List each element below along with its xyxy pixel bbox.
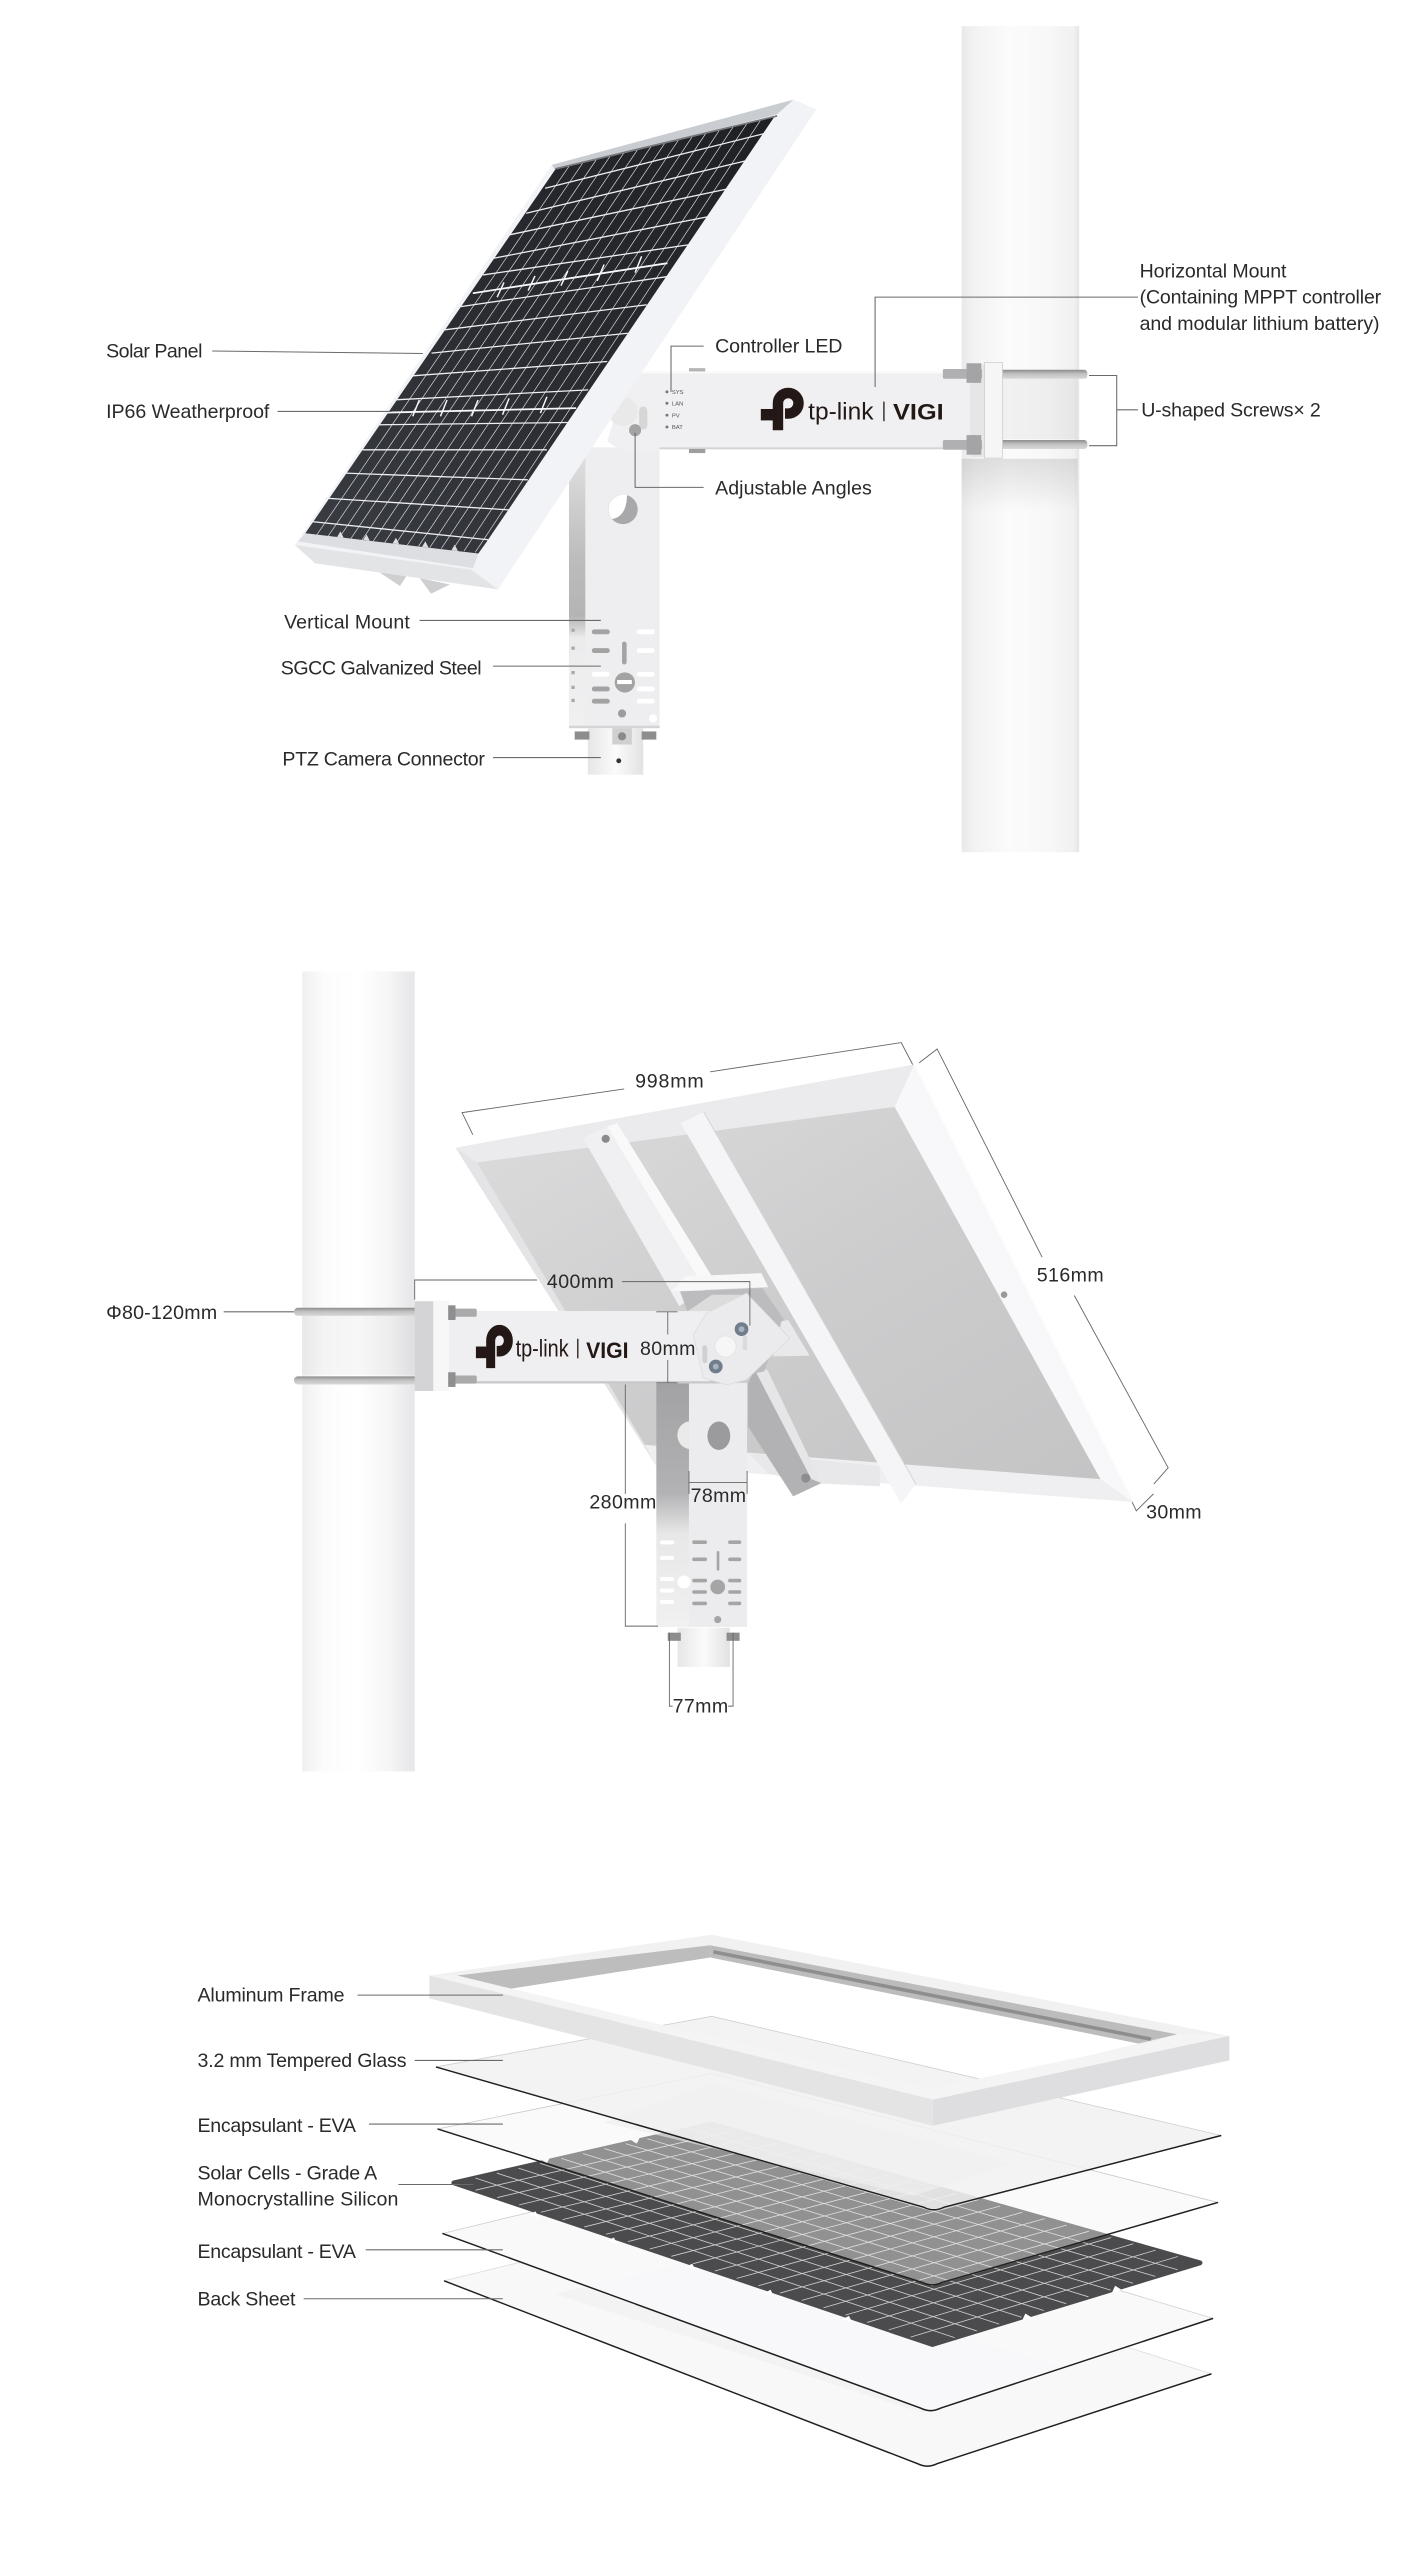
- mount hole: [608, 495, 638, 524]
- label: horizontal mount: and modular lithium battery): [1140, 313, 1380, 335]
- label: tempered glass: 3.2 mm Tempered Glass: [198, 2050, 407, 2072]
- back sheet: [477, 1107, 1100, 1479]
- label: SGCC galvanized steel: SGCC Galvanized Steel: [281, 657, 482, 679]
- dimension: 998mm: [462, 1043, 913, 1135]
- angle adjuster: [608, 397, 647, 436]
- horizontal arm: [415, 1301, 727, 1391]
- tp-link VIGI logo: VIGI: [586, 1338, 629, 1363]
- front hole: [707, 1422, 730, 1450]
- vertical mount: [569, 447, 660, 728]
- label: solar cells: Solar Cells - Grade A: [198, 2163, 378, 2185]
- rail one: [583, 1123, 715, 1306]
- logo text: tp-link: [808, 399, 874, 426]
- label: aluminum frame: Aluminum Frame: [198, 1985, 345, 2007]
- layer: lower encapsulant: [442, 2168, 1213, 2411]
- logo mark: [476, 1330, 508, 1368]
- cell grid: [475, 2129, 1178, 2338]
- layer: tempered glass: [436, 2016, 1221, 2211]
- clamp plate and bolts: [943, 362, 1002, 458]
- cell columns: [317, 121, 760, 552]
- tp-link VIGI logo: VIGI: [893, 400, 944, 425]
- label: horizontal mount: (Containing MPPT controller: [1140, 287, 1382, 309]
- U-shaped screws: [999, 370, 1087, 449]
- cell rows: [311, 133, 766, 540]
- controller LEDs: BAT: [672, 425, 683, 431]
- label: vertical mount: Vertical Mount: [284, 612, 410, 634]
- lower channel: [748, 1370, 821, 1496]
- label: horizontal mount: [875, 261, 1382, 387]
- panel frame: [295, 100, 816, 589]
- dimension: 516mm: 516mm: [1037, 1265, 1104, 1287]
- dimension: 280mm: 280mm: [589, 1492, 656, 1514]
- rotating plate: [693, 1293, 790, 1385]
- connector rear: [668, 1628, 740, 1667]
- dimension: 80mm: 80mm: [640, 1338, 696, 1360]
- layer: upper encapsulant: [438, 2073, 1218, 2286]
- dimension: 280mm: [589, 1384, 658, 1626]
- dimension: pole diameter: Φ80-120mm: [106, 1302, 217, 1324]
- label: solar cells: Monocrystalline Silicon: [198, 2189, 398, 2211]
- dimension: 516mm: [919, 1049, 1168, 1484]
- panel: rear view with dimensions: [106, 971, 1202, 1771]
- controller LEDs: SYS: [672, 390, 684, 396]
- label: controller LED: Controller LED: [715, 336, 842, 358]
- solar panel: [295, 100, 816, 589]
- PTZ camera connector: [575, 728, 656, 775]
- label: controller LED: [671, 336, 842, 392]
- tp-link VIGI logo: [476, 1330, 629, 1368]
- rail two: [681, 1112, 916, 1504]
- panel: exploded layers: [198, 1935, 1229, 2467]
- slots: [692, 1540, 741, 1623]
- dimension: 998mm: 998mm: [635, 1070, 704, 1092]
- layer: solar cells: [454, 2124, 1200, 2344]
- cell edge notches: [529, 2137, 1122, 2322]
- tp-link VIGI logo: [761, 393, 944, 430]
- label: solar panel: Solar Panel: [106, 341, 202, 363]
- controller LEDs: LAN: [672, 401, 683, 407]
- label: encapsulant upper: Encapsulant - EVA: [198, 2115, 357, 2137]
- label: IP66 weatherproof: IP66 Weatherproof: [106, 401, 270, 423]
- label: adjustable angles: [635, 433, 872, 500]
- layer: aluminum frame: [429, 1935, 1229, 2126]
- dimension: 80mm: [640, 1312, 696, 1383]
- dimension: 30mm: [1132, 1494, 1202, 1523]
- pivot bracket: [672, 1273, 810, 1381]
- dimension: 78mm: 78mm: [691, 1485, 746, 1507]
- label: PTZ camera connector: PTZ Camera Connector: [282, 749, 485, 771]
- cell notches: [337, 531, 458, 551]
- label: solar cells: [198, 2163, 473, 2211]
- logo mark: [761, 393, 799, 430]
- solar panel rear: [456, 1064, 1133, 1504]
- controller LEDs: [665, 390, 684, 431]
- brackets under panel: [378, 571, 450, 594]
- label: horizontal mount: Horizontal Mount: [1140, 261, 1287, 283]
- vertical mount rear: [656, 1383, 747, 1627]
- label: adjustable angles: Adjustable Angles: [715, 478, 872, 500]
- pole: [962, 26, 1079, 852]
- panel: front view of solar mount: [106, 26, 1382, 852]
- label: encapsulant lower: Encapsulant - EVA: [198, 2241, 357, 2263]
- controller LEDs: PV: [672, 413, 680, 419]
- pole: [302, 971, 415, 1771]
- layer: back sheet: [444, 2216, 1211, 2467]
- dimension: 78mm: [689, 1471, 747, 1507]
- dimension: 30mm: 30mm: [1146, 1501, 1202, 1523]
- label: U-shaped screws: [1089, 376, 1321, 446]
- dimension: 77mm: [669, 1633, 733, 1718]
- frame bottom bar: [748, 1453, 880, 1486]
- busbar rows with glints: [387, 263, 667, 413]
- solar cells: [305, 118, 774, 553]
- label: back sheet: Back Sheet: [198, 2288, 296, 2310]
- mount slots: [571, 629, 657, 722]
- side hole: [677, 1421, 689, 1449]
- dimension: 400mm: 400mm: [547, 1271, 614, 1293]
- horizontal mount arm: [607, 368, 971, 453]
- logo text: tp-link: [516, 1337, 569, 1363]
- dimension: 400mm: [415, 1271, 750, 1326]
- dimension: 77mm: 77mm: [673, 1696, 728, 1718]
- label: U-shaped screws: U-shaped Screws× 2: [1141, 399, 1321, 421]
- U-shaped rings: [294, 1308, 428, 1384]
